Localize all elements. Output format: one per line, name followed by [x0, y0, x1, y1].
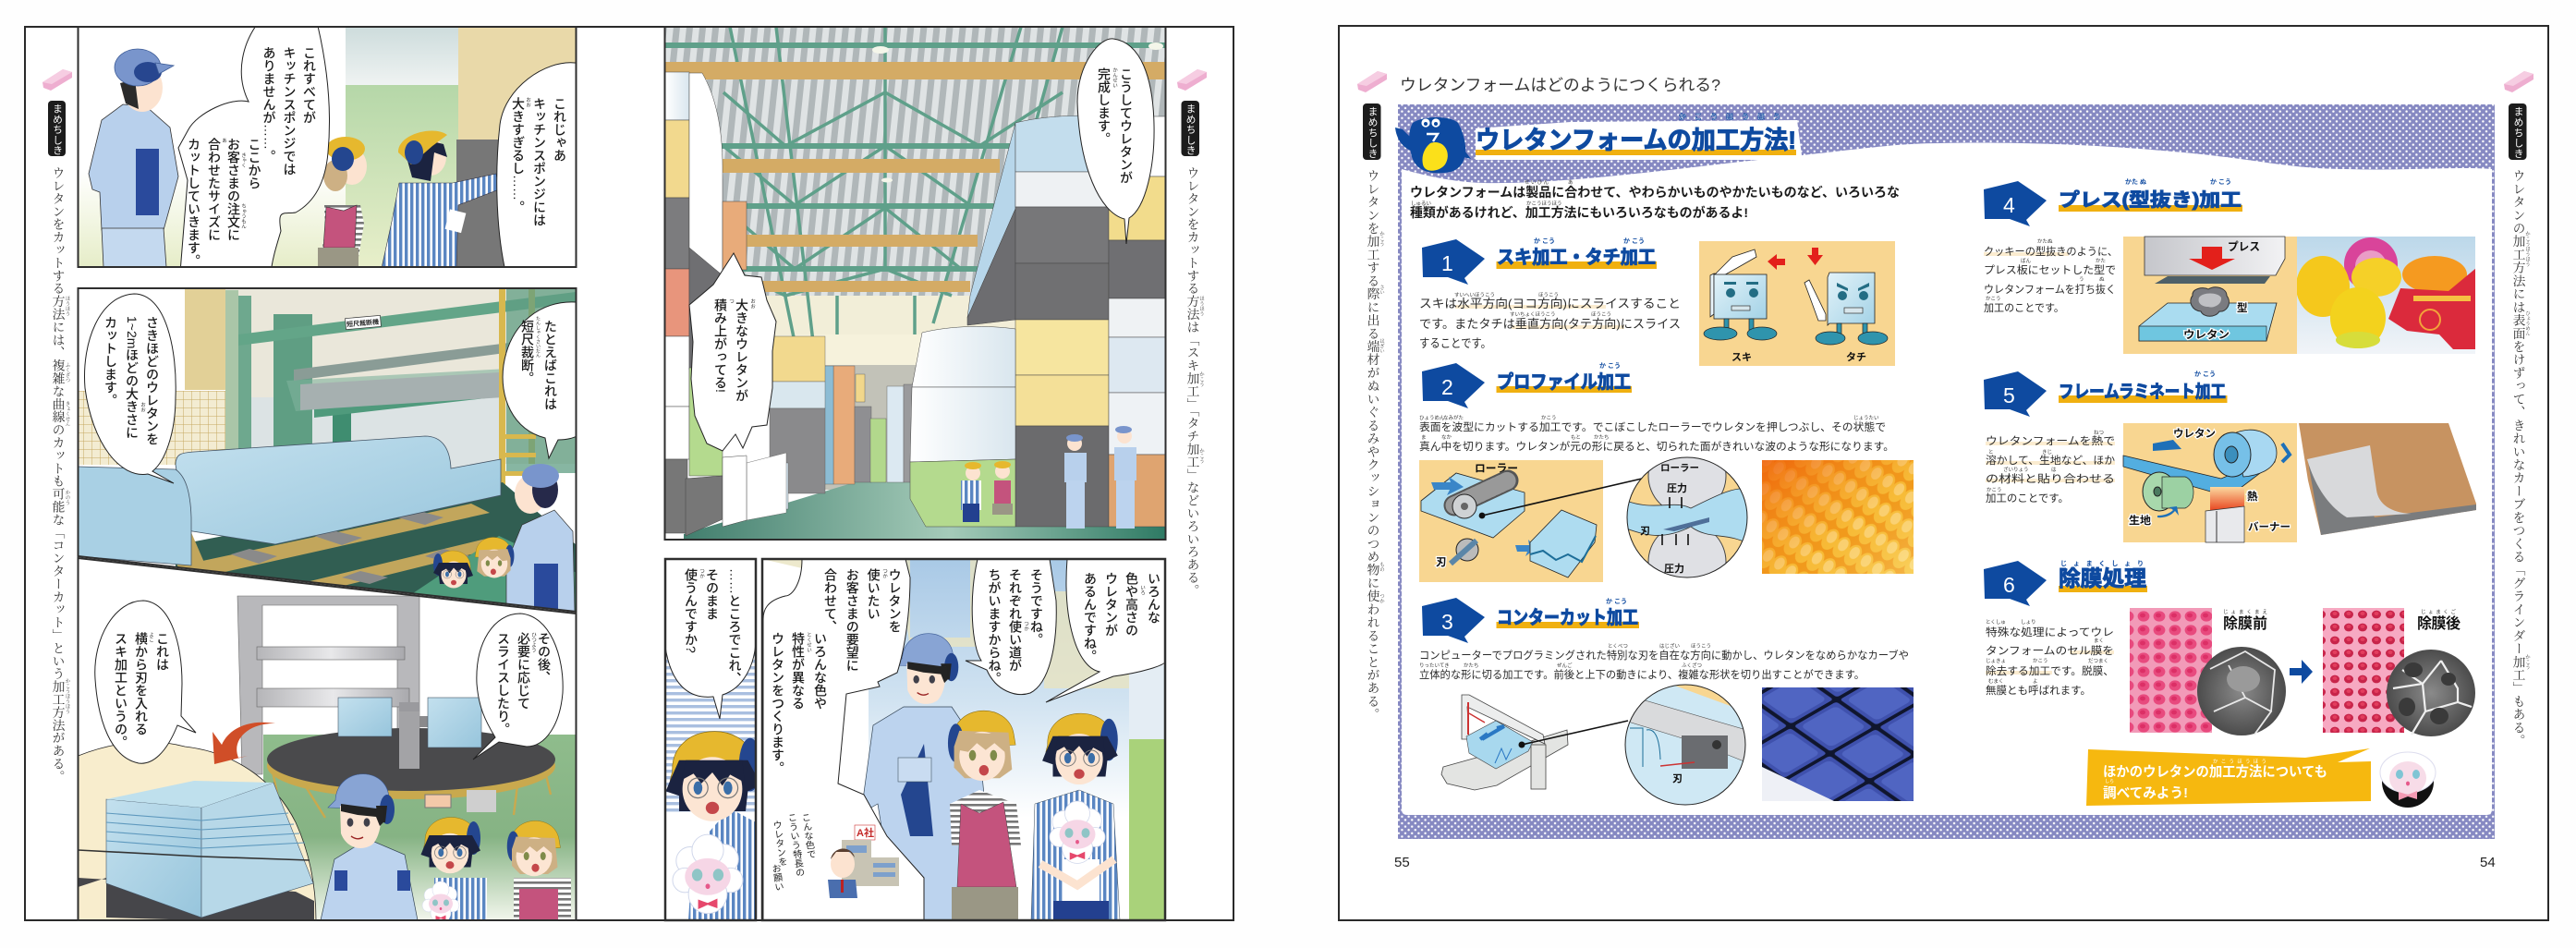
mascot: sheep	[2380, 752, 2436, 808]
bubble text: warehouse: こうしてウレタンが	[1119, 67, 1134, 184]
sidebar: trivia column left: はざい	[1379, 338, 1385, 354]
bubble text: short cut: 短尺裁断。	[520, 320, 535, 384]
section 3: contour cut: ぜんご	[1557, 662, 1573, 669]
section 5: flame lamination: きじ	[2042, 449, 2052, 456]
bubble text: short cut: おお	[140, 402, 146, 412]
bubble text: kitchen sponge: きゃく	[240, 152, 247, 168]
bubble text: request: あるんですね。	[1083, 572, 1098, 662]
section 5: flame lamination: かこう	[1987, 487, 2002, 493]
diagram: magnified roller: 刃	[1640, 526, 1650, 537]
speech bubble: uses	[966, 559, 1056, 695]
section 5: flame lamination: 加工のことです。	[1986, 492, 2069, 504]
section 1: skiving and vertical cut: すいちょくほうこう	[1510, 311, 1556, 318]
panel: main dotted frame	[1398, 104, 2495, 839]
small figures at bottom	[961, 426, 1136, 529]
panel: made to customer request	[762, 559, 1166, 920]
bubble text: request: 色や高さの	[1124, 571, 1139, 637]
bubble text: request: そうですね。	[1029, 568, 1044, 646]
sidebar: center trivia column: かこう	[1198, 448, 1205, 465]
bubble text: question	[684, 568, 743, 685]
diagram: skiving and vertical cut characters: タチ	[1846, 351, 1866, 363]
bubble text: short cut: カットします。	[103, 316, 118, 407]
panel 1 border	[78, 27, 577, 267]
sidebar: trivia column right: かこう	[2524, 654, 2531, 671]
bubble text: warehouse: 完成します。	[1097, 67, 1112, 145]
bubble text: request: 使いたい	[867, 568, 881, 620]
diagram: magnified roller: 圧力	[1664, 562, 1684, 575]
section 1: skiving and vertical cut: スキは水平方向(ヨコ方向)にスライスすること	[1419, 297, 1681, 310]
roof truss	[665, 27, 1166, 342]
section 3: contour cut: コンターカット加工	[1497, 607, 1638, 628]
diagram: foam after membrane removal: じょまくご	[2421, 608, 2456, 615]
section 6: membrane removal: 除去する加工です。脱膜、	[1986, 664, 2114, 677]
section 6: membrane removal: むまく	[1988, 678, 2004, 685]
intro text: 種類があるけれど、加工方法にもいろいろなものがあるよ!	[1410, 205, 1748, 220]
section 6: membrane removal: 除膜処理	[2059, 566, 2146, 590]
bubble text: kitchen sponge: カットしていきます。	[187, 138, 201, 267]
section 4: press die-cutting: かこう	[1986, 296, 2001, 302]
page number 54: 54	[2480, 855, 2496, 870]
section 4: press die-cutting: かた	[2096, 258, 2106, 264]
bubble text: request: つか	[1023, 621, 1029, 632]
page number 55: 55	[1394, 855, 1410, 870]
diagram: magnified contour blade: 刃	[1672, 773, 1683, 784]
arrow: before to after	[2290, 660, 2313, 684]
section 3: contour cut: りったいてき	[1419, 662, 1450, 669]
bubble text: request: いろ	[1139, 585, 1146, 596]
bubble text: short cut: 1~2mほどの大きさに	[125, 316, 140, 439]
spread frame	[25, 27, 1233, 920]
bubble text: question: そのまま	[705, 568, 720, 620]
section 1: skiving and vertical cut: です。またタチは垂直方向(タテ方向)にスライス	[1419, 317, 1681, 331]
speech bubble: colors	[1046, 559, 1166, 702]
diagram: foam before membrane removal: 除膜前	[2223, 614, 2267, 632]
section 3: contour cut: はじざい	[1659, 642, 1681, 650]
bubble text: question: ……ところでこれ、	[728, 568, 743, 685]
warehouse panel border	[665, 27, 1166, 540]
section 4: press die-cutting: プレス(型抜き)加工	[2059, 189, 2242, 211]
bubble text: warehouse: 大きなウレタンが	[735, 298, 749, 402]
sidebar: center trivia column: ウレタンをカットする方法は「スキ加工」「タチ加工」などいろいろある。	[1185, 166, 1199, 597]
section 3: contour cut: コンピューターでプログラミングされた特別な刃を自在な方向に動かし、ウレタンをなめらかなカーブや	[1419, 649, 1909, 662]
sidebar: trivia column left	[1363, 103, 1385, 721]
sidebar: trivia column right: ウレタンの加工方法には表面をけずって、きれいなカーブをつくる「グラインダー加工」もある。	[2511, 169, 2525, 747]
right textbook page	[1339, 26, 2548, 920]
callout: research other methods: しら	[2105, 779, 2114, 784]
diagram: flame lamination	[2123, 423, 2297, 542]
panel: warehouse of urethane stacks	[665, 27, 1166, 540]
section 5: flame lamination: か こう	[2194, 370, 2216, 378]
girl looking up	[948, 711, 1021, 920]
bubble text: short cut	[103, 316, 558, 445]
section 4: press die-cutting: 加工のことです。	[1984, 302, 2064, 314]
sidebar: center trivia column: かこう	[1198, 371, 1205, 388]
section 5: flame lamination: ねつ	[2094, 430, 2104, 436]
section 4: press die-cutting: かた ぬ	[2125, 178, 2146, 186]
panel 2 border	[78, 288, 577, 612]
panel: cutting machinery: 短尺裁断機	[346, 318, 379, 329]
section 3: contour cut	[1419, 597, 1909, 681]
bubble text: request: それぞれ使い道が	[1008, 568, 1023, 672]
bubble text: skiving: ひつよう	[530, 632, 537, 652]
girl with yellow cap	[318, 137, 367, 268]
heading: urethane foam processing methods: ウレタンフォームの加工方法!	[1476, 127, 1796, 154]
bubble text: kitchen sponge: 大きすぎるし……。	[511, 97, 526, 213]
section 2: profile processing: ま	[1421, 434, 1427, 441]
section 5: flame lamination: と	[1988, 449, 1994, 456]
heading: urethane foam processing methods	[1476, 113, 1802, 160]
conveyor floor	[176, 482, 575, 593]
callout: research other methods: ほかのウレタンの加工方法についても	[2103, 763, 2327, 780]
section 4: press die-cutting: ウレタンフォームを打ち抜く	[1984, 283, 2116, 296]
diagram: profile roller: 刃	[1436, 557, 1447, 568]
foam block left	[78, 467, 191, 565]
bubble text: skiving	[114, 631, 552, 748]
section 2: profile processing: 2	[1441, 375, 1453, 399]
photo: contour-cut mat	[1762, 687, 1914, 801]
bubble text: kitchen sponge: お客さまの注文に	[226, 138, 241, 241]
callout: research other methods: かこうほうほう	[2213, 759, 2266, 765]
section 6: membrane removal: 無膜とも呼ばれます。	[1986, 684, 2091, 697]
section 5: flame lamination: 溶かして、生地など、ほか	[1986, 454, 2116, 467]
section 3: contour cut: とくべつ	[1608, 643, 1628, 650]
diagram: profile roller	[1419, 460, 1642, 582]
section 2: profile processing	[1419, 361, 1894, 453]
sidebar: left trivia column	[43, 69, 72, 783]
section 1: skiving and vertical cut: 1	[1441, 251, 1453, 275]
section 1: skiving and vertical cut: か こう	[1534, 237, 1555, 245]
section 5: flame lamination: ざいりょう	[2003, 466, 2029, 473]
section 6: membrane removal: 6	[2003, 573, 2015, 597]
floor	[684, 482, 1166, 540]
small panel border	[665, 559, 756, 920]
section 2: profile processing: ひょうめん	[1419, 415, 1445, 421]
diagram: press die: 型	[2237, 302, 2247, 314]
sidebar: center trivia column	[1177, 69, 1207, 597]
section 5: flame lamination: 5	[2003, 383, 2015, 407]
bubble text: request: ウレタンをつくります。	[771, 632, 785, 774]
bubble text: request: いろんな	[1147, 572, 1161, 624]
section 5: flame lamination: は	[2051, 467, 2057, 473]
diagram: foam before membrane removal	[2130, 608, 2286, 735]
section 2: profile processing: じょうたい	[1853, 415, 1879, 421]
panel: question from the boy	[666, 568, 755, 919]
sidebar: trivia column left: まめちしき	[1367, 106, 1378, 159]
bubble text: request: ウレタンが	[1104, 572, 1119, 637]
section 5: flame lamination: の材料と貼り合わせる	[1986, 472, 2115, 485]
bubble text: kitchen sponge: ありませんが……。	[262, 46, 277, 163]
section 4: press die-cutting	[1984, 177, 2242, 314]
page header: ウレタンフォームはどのようにつくられる?	[1400, 76, 1720, 94]
sidebar: left trivia column: ふくざつ	[65, 362, 70, 383]
section 6: membrane removal: しょり	[2021, 619, 2036, 626]
section 6: membrane removal: だつまく	[2088, 658, 2108, 664]
section 4: press die-cutting: ばん	[2021, 257, 2031, 264]
bubble text: question: つか	[699, 568, 705, 579]
boy and mascot	[421, 818, 487, 923]
panel: cutting machinery	[78, 288, 582, 628]
mini company scene: こういう特長の	[785, 812, 805, 878]
speech bubble: right	[503, 302, 582, 458]
instructor	[321, 774, 418, 920]
page frame	[1339, 26, 2548, 920]
bubble text: warehouse: つ	[728, 298, 735, 304]
left manga spread	[25, 18, 1233, 923]
bubble text: kitchen sponge: おお	[525, 97, 531, 107]
section 1: skiving and vertical cut	[1419, 237, 1681, 350]
sidebar: trivia column left: かこう	[1379, 231, 1385, 248]
diagram: contour cutter	[1441, 695, 1628, 790]
bubble text: request: いろんな色や	[813, 632, 828, 710]
diagram: foam after membrane removal: 除膜後	[2417, 614, 2461, 632]
section 3: contour cut: か こう	[1606, 597, 1627, 605]
mini company scene: お願い	[770, 863, 784, 892]
mini company scene: ウレタンを	[771, 820, 787, 867]
bubble text: request: とくせい	[806, 632, 812, 652]
section 2: profile processing: なか	[1441, 434, 1452, 441]
bubble text: request	[771, 568, 1161, 774]
sidebar: trivia column right: ひょうめん	[2524, 310, 2531, 336]
sidebar: trivia column left: つか	[1379, 593, 1385, 603]
sidebar: trivia column right: かこうほうほう	[2524, 231, 2531, 268]
sidebar: trivia column left: さい	[1379, 285, 1385, 295]
bubble text: request: 合わせて、	[823, 568, 838, 633]
diagram: profile roller: ローラー	[1475, 462, 1518, 475]
boy close up	[666, 732, 761, 920]
bubble text: kitchen sponge: これじゃあ	[553, 97, 567, 162]
bubble text: warehouse: おお	[749, 298, 756, 309]
section 3: contour cut: かたち	[1464, 662, 1479, 669]
intro text: ウレタンフォームは製品に合わせて、やわらかいものやかたいものなど、いろいろな	[1410, 185, 1900, 200]
bubble text: skiving: スライスしたり。	[496, 632, 511, 735]
sidebar: trivia column right: まめちしき	[2512, 106, 2523, 159]
sidebar: left trivia column: きょくせん	[65, 401, 70, 427]
intro text: せいひん	[1525, 179, 1549, 186]
section 6: membrane removal: まく	[2094, 638, 2104, 644]
mascot: blue penguin	[1395, 117, 1471, 173]
sidebar: trivia column left: もの	[1379, 562, 1385, 572]
bubble text: question: 使うんですか?	[684, 568, 699, 653]
diagram: foam after membrane removal	[2323, 608, 2475, 736]
bubble text: kitchen sponge: ちゅうもん	[240, 203, 247, 229]
rotating table with foam	[267, 698, 555, 818]
section 4: press die-cutting: かたぬ	[2037, 238, 2053, 245]
intro text: かこうほうほう	[1526, 201, 1562, 207]
skiving machine frame	[237, 596, 437, 774]
bubble text: kitchen sponge	[187, 46, 567, 267]
section 4: press die-cutting: 4	[2003, 193, 2015, 217]
speech bubble: left	[95, 601, 196, 763]
section 1: skiving and vertical cut: か こう	[1623, 237, 1645, 245]
boy pointing	[382, 130, 499, 268]
diagram: flame lamination: ウレタン	[2173, 428, 2216, 440]
bubble text: skiving: 必要に応じて	[516, 632, 531, 710]
section 2: profile processing: か こう	[1599, 361, 1621, 370]
sidebar: left trivia column: まめちしき	[52, 103, 63, 155]
section 2: profile processing: なみがた	[1443, 414, 1464, 421]
photo: laminated sheet	[2299, 423, 2476, 535]
section 1: skiving and vertical cut: することです。	[1419, 336, 1491, 350]
section 2: profile processing: かこう	[1541, 415, 1557, 421]
mini company scene: A社	[857, 826, 874, 839]
left stacks	[665, 72, 747, 536]
intro text: しゅるい	[1411, 201, 1432, 207]
diagram: flame lamination: 生地	[2129, 514, 2152, 527]
bubble text: request: ちがいますからね。	[987, 568, 1002, 685]
diagram: skiving and vertical cut characters: スキ	[1732, 352, 1752, 363]
bubble text: kitchen sponge: キッチンスポンジには	[532, 97, 547, 226]
boy with mascot	[1031, 713, 1120, 920]
bubble text: request: お客さまの要望に	[845, 568, 860, 672]
bubble text: request: 特性が異なる	[791, 632, 806, 710]
spiky speech bubble	[689, 253, 776, 451]
bubble text: short cut: さきほどのウレタンを	[145, 316, 160, 445]
sidebar: trivia column left: ウレタンを加工する際に出る端材がぬいぐるみやクッションのつめ物に使われることがある。	[1366, 169, 1379, 721]
photo: profile-cut foam	[1762, 460, 1914, 574]
section 6: membrane removal: 特殊な処理によってウレ	[1986, 626, 2114, 638]
section 4: press die-cutting: クッキーの型抜きのように、	[1984, 245, 2118, 258]
diagram: skiving and vertical cut characters	[1699, 241, 1895, 366]
bubble text: kitchen sponge: ここから	[248, 138, 262, 189]
sidebar: left trivia column: かのう	[65, 490, 70, 506]
sidebar: trivia column right	[2504, 71, 2533, 747]
bubble text: skiving: その後、	[537, 632, 552, 684]
bubble text: request: つか	[881, 568, 888, 579]
far stacks	[824, 366, 918, 484]
section 4: press die-cutting: ぬ	[2099, 276, 2105, 283]
bubble text: short cut: たとえばこれは	[543, 320, 558, 410]
section 3: contour cut: 3	[1441, 610, 1453, 634]
mini company scene: こんな色で	[799, 812, 816, 859]
section 5: flame lamination	[1984, 370, 2227, 504]
mid-left stacks	[747, 336, 825, 520]
intro text	[1410, 179, 1900, 220]
right stacks	[910, 115, 1166, 527]
panel 3 border	[78, 558, 577, 920]
section 2: profile processing: かたち	[1594, 434, 1610, 441]
diagram: press die: プレス	[2228, 240, 2260, 253]
section 2: profile processing: 真ん中を切ります。ウレタンが元の形に戻ると、切られた面がきれいな波のような形になります。	[1419, 440, 1894, 453]
diagram: press die: ウレタン	[2183, 329, 2230, 341]
bubble text: skiving: スキ加工というの。	[114, 632, 128, 748]
speech bubble: left	[84, 294, 176, 483]
section 1: skiving and vertical cut: ほうこう	[1538, 292, 1559, 298]
speech bubble: request	[763, 559, 924, 920]
heading: urethane foam processing methods: かこうほうほう	[1679, 113, 1780, 121]
red arrow	[213, 723, 275, 764]
section 3: contour cut: ほうこう	[1691, 643, 1711, 650]
speech bubble: center	[178, 18, 330, 273]
section 4: press die-cutting: う	[2079, 276, 2084, 283]
worker seen from behind	[89, 49, 178, 267]
speech bubble: right	[496, 62, 575, 266]
diagram: magnified roller	[1622, 437, 1751, 601]
bubble text: skiving: よこ	[148, 632, 154, 642]
section 3: contour cut: ふくざつ	[1682, 662, 1702, 669]
speech bubble: right	[473, 614, 563, 760]
page header	[1357, 71, 1720, 94]
section 6: membrane removal: じょまくしょり	[2060, 559, 2144, 567]
callout: research other methods: 調べてみよう!	[2103, 785, 2188, 801]
section 2: profile processing: プロファイル加工	[1497, 371, 1631, 393]
section 2: profile processing: もと	[1571, 434, 1581, 441]
section 6: membrane removal	[1984, 559, 2147, 697]
section 2: profile processing: 表面を波型にカットする加工です。でこぼこしたローラーでウレタンを押しつぶし、その状態で	[1419, 420, 1886, 433]
sidebar: left trivia column: ほうほう	[65, 296, 70, 317]
diagram: magnified roller: 圧力	[1667, 481, 1687, 494]
section 1: skiving and vertical cut: すいへいほうこう	[1454, 292, 1495, 298]
section 6: membrane removal: タンフォームのセル膜を	[1986, 645, 2114, 657]
diagram: press die	[2123, 237, 2297, 354]
photo: die-cut sponges	[2296, 237, 2476, 354]
speech bubble	[665, 559, 756, 719]
section 5: flame lamination: フレームラミネート加工	[2059, 382, 2226, 402]
bubble text: skiving: 横から刃を入れる	[134, 631, 149, 735]
intro text: あ	[1568, 179, 1574, 186]
mini company scene	[770, 812, 899, 898]
sidebar: left trivia column: ウレタンをカットする方法には、複雑な曲線のカットも可能な「コンターカット」という加工方法がある。	[50, 166, 65, 783]
sidebar: left trivia column: かこうほうほう	[65, 678, 70, 715]
magnified foam stack	[78, 742, 316, 920]
bubble text: skiving: これは	[155, 632, 170, 671]
diagram: magnified roller: ローラー	[1660, 463, 1699, 474]
section 3: contour cut: 立体的な形に切る加工です。前後と上下の動きにより、複雑な形状を切り出すことができます。	[1419, 668, 1865, 681]
bubble text: kitchen sponge: あ	[221, 138, 227, 143]
bubble text: short cut: たんしゃくさいだん	[535, 316, 541, 358]
speech bubble: top	[1077, 39, 1154, 244]
sidebar: center trivia column: ほうほう	[1198, 296, 1205, 317]
worker explaining	[861, 634, 984, 920]
bubble text: kitchen sponge: 合わせたサイズに	[207, 138, 222, 241]
long foam block	[176, 436, 501, 544]
diagram: flame lamination: 熱	[2247, 490, 2258, 503]
section 1: skiving and vertical cut: スキ加工・タチ加工	[1497, 247, 1656, 268]
panel: urethan too big for sponges	[78, 18, 591, 273]
section 5: flame lamination: ウレタンフォームを熱で	[1986, 435, 2115, 447]
section 4: press die-cutting: プレス板にセットした型で	[1984, 263, 2116, 276]
callout: research other methods	[2086, 748, 2371, 806]
diagram: flame lamination: バーナー	[2248, 521, 2290, 533]
section 1: skiving and vertical cut: ほうこう	[1591, 311, 1611, 318]
section 4: press die-cutting: か こう	[2210, 177, 2231, 186]
bubble text: warehouse: 積み上がってる!	[713, 298, 728, 393]
section 6: membrane removal: じょきょ	[1986, 658, 2006, 664]
worker and children watching	[433, 464, 575, 614]
section 6: membrane removal: とくしゅ	[1986, 619, 2006, 626]
bubble text: warehouse: かんせい	[1112, 67, 1118, 88]
bubble text: kitchen sponge: これすべてが	[302, 46, 317, 124]
girl	[507, 820, 571, 920]
section 6: membrane removal: よ	[2033, 678, 2038, 685]
bubble text: request: ウレタンを	[888, 568, 903, 633]
diagram: foam before membrane removal: じょまくまえ	[2223, 609, 2267, 615]
panel: skiving machine	[79, 595, 575, 919]
diagram: magnified contour blade	[1625, 685, 1746, 805]
bubble text: warehouse	[713, 67, 1134, 402]
sidebar: center trivia column: まめちしき	[1185, 103, 1196, 155]
section 6: membrane removal: かこう	[2033, 658, 2048, 664]
large panel border	[762, 559, 1165, 920]
bubble text: kitchen sponge: キッチンスポンジでは	[283, 46, 298, 176]
